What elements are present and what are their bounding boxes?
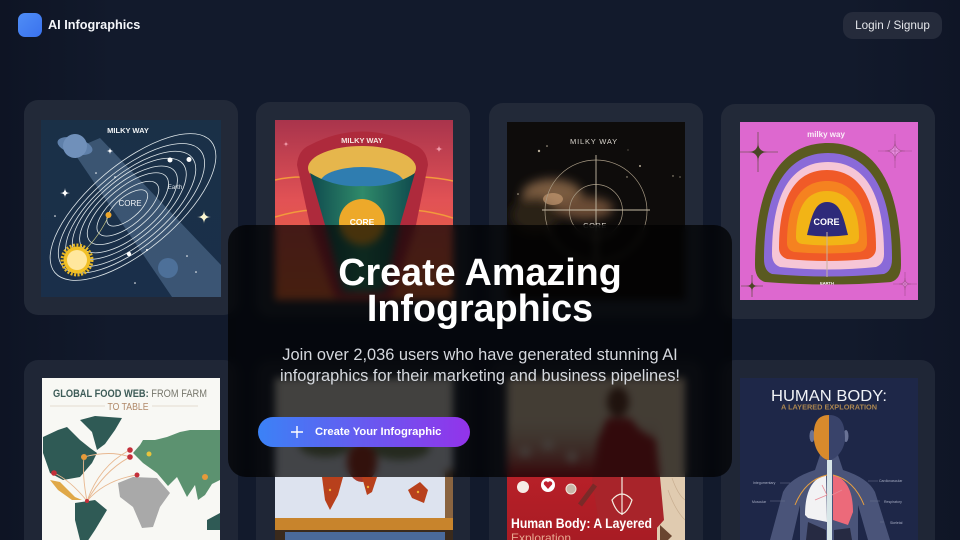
illustration: anatomy poster: HUMAN BODY: [771, 388, 887, 405]
card: food web map [24, 360, 238, 540]
hero panel [228, 225, 732, 477]
login button: Login / Signup [855, 19, 930, 32]
illustration: anatomy poster: Muscular [752, 500, 767, 504]
heading [338, 251, 622, 329]
illustration: anatomy poster: Integumentary [753, 481, 776, 485]
illustration: pink layered dome: CORE [813, 217, 840, 227]
illustration: global food web [42, 378, 220, 540]
illustration: red layered cone: CORE [350, 217, 375, 227]
illustration: milky way orbits: CORE [118, 199, 142, 208]
illustration: anatomy poster [740, 378, 918, 540]
illustration: milky way orbits [41, 120, 221, 297]
card: human body navy [721, 360, 935, 540]
illustration: milky way orbits: MILKY WAY [107, 126, 149, 135]
illustration: dark galaxy diagram: MILKY WAY [570, 137, 618, 146]
illustration: pink layered dome: EARTH [820, 280, 834, 286]
call to action button [258, 417, 470, 447]
illustration: human body layered: Human Body: A Layered [511, 515, 652, 531]
brand name: AI Infographics [48, 18, 140, 32]
subheading [280, 346, 680, 385]
illustration: dark galaxy diagram: CORE [583, 221, 607, 230]
icon: plus [291, 426, 303, 438]
logo icon [18, 13, 42, 37]
illustration: dark galaxy diagram [507, 122, 685, 298]
card: food map on shelf [256, 360, 470, 540]
card: human body red [489, 360, 703, 540]
card: nebula infographic [489, 103, 703, 318]
call to action button: Create Your Infographic [315, 426, 441, 438]
illustration: red layered cone [271, 120, 457, 304]
illustration: global food web: GLOBAL FOOD WEB: FROM FARM [53, 388, 207, 400]
card: funnel infographic [256, 102, 470, 317]
heading: Create Amazing [338, 251, 622, 293]
illustration: anatomy poster: A LAYERED EXPLORATION [781, 404, 877, 412]
subheading: infographics for their marketing and business pipelines! [280, 367, 680, 385]
illustration: pink layered dome [740, 122, 918, 300]
illustration: anatomy poster: Cardiovascular [879, 479, 903, 483]
heading: Infographics [367, 287, 593, 329]
login button [843, 12, 942, 39]
illustration: milky way orbits: Earth [168, 185, 182, 191]
card: rainbow arch infographic [721, 104, 935, 319]
illustration: pink layered dome: milky way [807, 130, 845, 139]
illustration: human body layered [503, 374, 689, 540]
illustration: global food web: TO TABLE [108, 402, 149, 413]
illustration: anatomy poster: Skeletal [890, 521, 903, 525]
illustration: wall map with shelf [271, 374, 457, 540]
illustration: red layered cone: MILKY WAY [341, 136, 383, 145]
illustration: anatomy poster: Respiratory [884, 500, 902, 504]
card: orbit infographic [24, 100, 238, 315]
subheading: Join over 2,036 users who have generated stunning AI [282, 346, 678, 364]
